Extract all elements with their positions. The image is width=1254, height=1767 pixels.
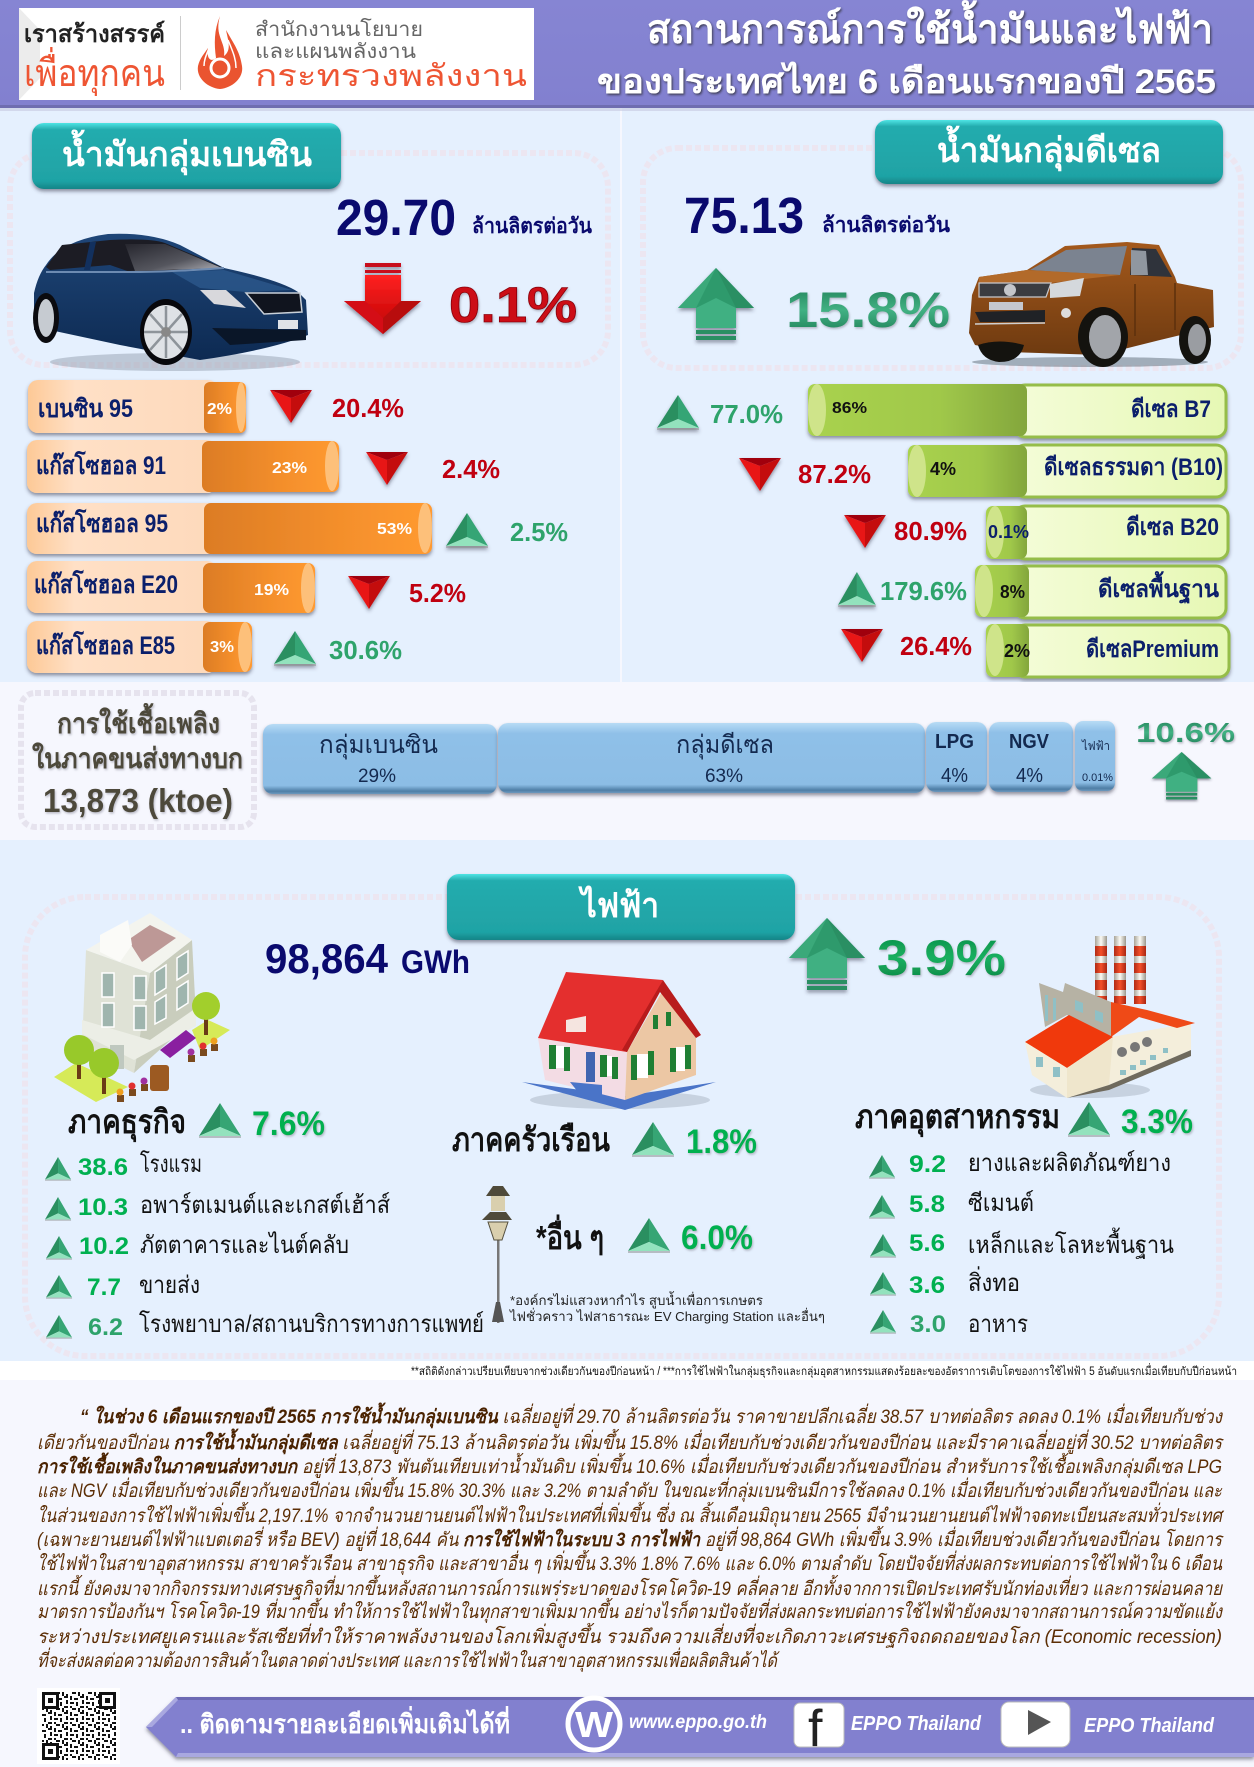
bar: diesel B10: 87.2%: [798, 459, 871, 489]
logo ministry name: กระทรวงพลังงาน: [255, 60, 527, 93]
bar chart: diesel products: [657, 384, 1229, 677]
electricity total: [265, 935, 470, 982]
footer banner: [146, 1697, 1254, 1758]
bar: base diesel: [838, 565, 1226, 618]
wholesale: ขายส่ง: [139, 1272, 200, 1299]
text block: summary paragraph: ระหว่างประเทศยูเครนและรัสเซียที่ทำให้ราคาพลังงานของโลกเพิ่มสูงขึ้น รวมถึงความเสี่ยงที่จะเกิดภาวะเศรษฐกิจถดถอยของโลก (Economic recession): [37, 1622, 1222, 1648]
heading: diesel group: [875, 120, 1223, 184]
hotels: 38.6: [78, 1154, 128, 1181]
heading: electricity: [447, 874, 795, 940]
cement: [869, 1189, 1034, 1219]
bar: gasohol 91: แก๊สโซฮอล 91: [36, 450, 166, 480]
callout: total land transport fuel: 13,873 (ktoe): [43, 782, 233, 819]
sector: residential: 1.8%: [686, 1123, 757, 1161]
segment: diesel share: กลุ่มดีเซล: [676, 731, 774, 760]
electricity change: 3.9%: [877, 930, 1006, 986]
rubber: ยางและผลิตภัณฑ์ยาง: [968, 1149, 1171, 1177]
segment: gasoline share: [263, 724, 497, 794]
food: อาหาร: [968, 1311, 1028, 1338]
textiles: สิ่งทอ: [968, 1266, 1020, 1297]
bar: diesel B20: 0.1%: [988, 522, 1029, 542]
bar chart: gasoline products: [27, 380, 568, 673]
gasoline unit: ล้านลิตรต่อวัน: [472, 214, 593, 238]
bar: gasohol E20: 5.2%: [409, 578, 466, 608]
icon: street lamp: [482, 1186, 512, 1323]
website url: www.eppo.go.th: [629, 1712, 767, 1733]
electricity total: GWh: [401, 944, 470, 980]
segment: gasoline share: กลุ่มเบนซิน: [319, 731, 438, 760]
logo slogan: เราสร้างสรรค์: [24, 20, 165, 48]
bar: gasohol E85: 3%: [210, 639, 234, 656]
sector: commercial: [68, 1103, 325, 1143]
icon: big up arrow: [789, 918, 865, 990]
icon: facebook: f: [808, 1700, 823, 1758]
segment: electricity share: ไฟฟ้า: [1081, 739, 1110, 753]
bar: diesel B7: 77.0%: [710, 399, 783, 429]
textiles: [870, 1266, 1020, 1299]
bar: gasohol 91: 23%: [272, 460, 307, 477]
heading: diesel group: น้ำมันกลุ่มดีเซล: [937, 125, 1161, 172]
land transport change: 10.6%: [1136, 717, 1235, 748]
logo agency name line two: และแผนพลังงาน: [255, 41, 416, 63]
sector: industrial: [855, 1098, 1193, 1141]
panel: electricity background: [0, 840, 1254, 1361]
bar: base diesel: 179.6%: [880, 576, 967, 606]
bar: gasohol 95: [27, 503, 568, 554]
hospitals: [46, 1310, 484, 1341]
restaurants: ภัตตาคารและไนต์คลับ: [140, 1231, 349, 1259]
textiles: 3.6: [909, 1272, 945, 1299]
bar: gasohol E85: 30.6%: [329, 635, 402, 665]
icon: QR code: [37, 1688, 120, 1764]
hotels: [45, 1150, 202, 1181]
restaurants: [46, 1231, 349, 1260]
callout: total land transport fuel: [21, 693, 254, 827]
facebook name: EPPO Thailand: [851, 1713, 982, 1735]
bar: gasohol 91: [27, 440, 500, 493]
restaurants: 10.2: [79, 1233, 129, 1260]
segment: diesel share: [498, 723, 925, 793]
steel: เหล็กและโลหะพื้นฐาน: [968, 1227, 1174, 1259]
panel: land transport fuel use: [0, 682, 1254, 838]
rubber: 9.2: [909, 1151, 946, 1178]
bar: gasohol 95: แก๊สโซฮอล 95: [36, 508, 168, 538]
food: 3.0: [910, 1311, 946, 1338]
icon: commercial building: [54, 913, 230, 1102]
text block: summary paragraph: [37, 1402, 1225, 1672]
bar: gasohol 95: 2.5%: [510, 517, 568, 547]
bar: diesel B20: [844, 506, 1228, 559]
follow text: .. ติดตามรายละเอียดเพิ่มเติมได้ที่: [180, 1705, 510, 1739]
bar: diesel B20: ดีเซล B20: [1126, 514, 1219, 541]
icon: red down arrow: [344, 263, 421, 334]
logo block: [19, 8, 534, 100]
icon: blue car: [33, 234, 308, 371]
segment: gasoline share: 29%: [358, 766, 396, 787]
apartments: 10.3: [78, 1194, 128, 1221]
bar: diesel B10: ดีเซลธรรมดา (B10): [1044, 454, 1223, 481]
segment: LPG share: [926, 722, 987, 792]
bar: gasohol 95 premium row benzene 95: 20.4%: [332, 393, 404, 423]
diesel volume: 75.13: [684, 187, 804, 244]
panel: gasoline summary: [10, 123, 608, 371]
list: commercial breakdown: [45, 1150, 484, 1341]
icon: brown pickup: [969, 242, 1214, 367]
heading: electricity: ไฟฟ้า: [578, 885, 659, 925]
footnote strip background: [0, 1361, 1254, 1380]
segment: LPG share: LPG: [935, 731, 974, 753]
note: other sector definition: [509, 1291, 825, 1324]
rubber: [869, 1149, 1171, 1179]
note: other sector definition: *องค์กรไม่แสวงหากำไร สูบน้ำเพื่อการเกษตร: [510, 1291, 763, 1309]
bar: premium diesel: 2%: [1004, 641, 1030, 661]
title line 1: สถานการณ์การใช้น้ำมันและไฟฟ้า: [647, 0, 1213, 52]
cement: ซีเมนต์: [968, 1189, 1034, 1217]
icon: website: [568, 1698, 620, 1750]
icon: flame emblem: [198, 16, 242, 89]
wholesale: [46, 1272, 200, 1301]
sector: commercial: 7.6%: [252, 1105, 325, 1143]
bar: gasohol 95 premium row benzene 95: [28, 380, 404, 433]
diesel unit: ล้านลิตรต่อวัน: [822, 213, 951, 237]
bar: gasohol E85: [27, 621, 402, 673]
segment: electricity share: 0.01%: [1082, 772, 1113, 784]
panel: gasoline group background: [0, 108, 620, 682]
sector: residential: [452, 1121, 757, 1161]
icon: facebook: [794, 1700, 844, 1758]
bar: gasohol 95: 53%: [377, 521, 412, 538]
segment: electricity share: [1075, 721, 1115, 791]
segment: NGV share: 4%: [1016, 765, 1043, 787]
youtube name: EPPO Thailand: [1084, 1715, 1215, 1737]
sector: industrial: 3.3%: [1121, 1103, 1193, 1141]
panel: electricity: [25, 874, 1219, 1356]
sector: others: 6.0%: [681, 1219, 753, 1257]
cement: 5.8: [909, 1191, 945, 1218]
logo slogan second line: เพื่อทุกคน: [24, 47, 165, 96]
header bar: [0, 0, 1254, 111]
bar: diesel B7: ดีเซล B7: [1131, 396, 1211, 423]
wholesale: 7.7: [87, 1274, 121, 1301]
steel: [870, 1227, 1174, 1259]
list: industrial breakdown: [869, 1149, 1174, 1338]
bar: base diesel: ดีเซลพื้นฐาน: [1098, 570, 1220, 605]
callout: total land transport fuel: ในภาคขนส่งทางบก: [32, 742, 243, 774]
sector: commercial: ภาคธุรกิจ: [68, 1103, 186, 1143]
sector: industrial: ภาคอุตสาหกรรม: [855, 1098, 1060, 1138]
bar: gasohol E85: แก๊สโซฮอล E85: [36, 630, 175, 660]
hotels: โรงแรม: [140, 1150, 202, 1178]
segment: NGV share: NGV: [1009, 731, 1050, 753]
bar: gasohol 95 premium row benzene 95: เบนซิน 95: [38, 395, 133, 423]
note: other sector definition: ไฟชั่วคราว ไฟสาธารณะ EV Charging Station และอื่นๆ: [509, 1308, 825, 1324]
segment: NGV share: [989, 722, 1073, 792]
bar: premium diesel: ดีเซลPremium: [1086, 636, 1219, 663]
title line 2: ของประเทศไทย 6 เดือนแรกของปี 2565: [597, 61, 1216, 101]
bar: diesel B10: 4%: [930, 459, 956, 479]
sector: others: [536, 1214, 753, 1257]
bar: gasohol E20: 19%: [254, 582, 289, 599]
panel: diesel group background: [622, 108, 1254, 682]
hospitals: 6.2: [88, 1314, 123, 1341]
gasoline change: 0.1%: [449, 277, 577, 333]
logo agency name: สำนักงานนโยบาย: [255, 18, 423, 41]
bar: gasohol 95 premium row benzene 95: 2%: [207, 401, 232, 418]
diesel change: 15.8%: [786, 282, 950, 338]
hospitals: โรงพยาบาล/สถานบริการทางการแพทย์: [139, 1310, 484, 1338]
panel: diesel summary: [643, 120, 1241, 368]
electricity total: 98,864: [265, 935, 389, 982]
text block: summary paragraph: ที่จะส่งผลต่อความต้องการสินค้าในตลาดต่างประเทศ และการใช้ไฟฟ้าในสาขาอุตสาหกรรมเพื่อผลิตสินค้าได้: [37, 1647, 780, 1672]
bar: premium diesel: 26.4%: [900, 631, 972, 661]
bar: premium diesel: [841, 624, 1229, 677]
apartments: [45, 1191, 390, 1221]
callout: total land transport fuel: การใช้เชื้อเพลิง: [57, 702, 220, 739]
bar: diesel B20: 80.9%: [894, 516, 967, 546]
sector: others: *อื่น ๆ: [536, 1214, 604, 1256]
icon: house: [522, 972, 716, 1110]
bar: gasohol E20: แก๊สโซฮอล E20: [34, 569, 178, 599]
bar: diesel B7: 86%: [832, 400, 867, 417]
steel: 5.6: [909, 1230, 945, 1257]
bar: gasohol 91: 2.4%: [442, 454, 500, 484]
icon: youtube: [1001, 1702, 1070, 1747]
icon: green up arrow: [678, 268, 754, 340]
heading: gasoline group: น้ำมันกลุ่มเบนซิน: [62, 129, 312, 176]
bar: base diesel: 8%: [1000, 582, 1025, 602]
bar: diesel B10: [739, 445, 1226, 497]
segment: diesel share: 63%: [705, 766, 743, 787]
heading: gasoline group: [32, 123, 341, 189]
icon: website: W: [575, 1704, 613, 1745]
apartments: อพาร์ตเมนต์และเกสต์เฮ้าส์: [140, 1191, 390, 1219]
bar: diesel B7: [657, 384, 1226, 437]
sector: residential: ภาคครัวเรือน: [452, 1121, 610, 1158]
icon: up arrow: [1152, 752, 1211, 800]
gasoline volume: 29.70: [336, 189, 456, 246]
icon: factory: [1025, 936, 1195, 1098]
bar: gasohol E20: [27, 561, 466, 613]
segment: LPG share: 4%: [941, 765, 968, 787]
food: [870, 1310, 1028, 1338]
